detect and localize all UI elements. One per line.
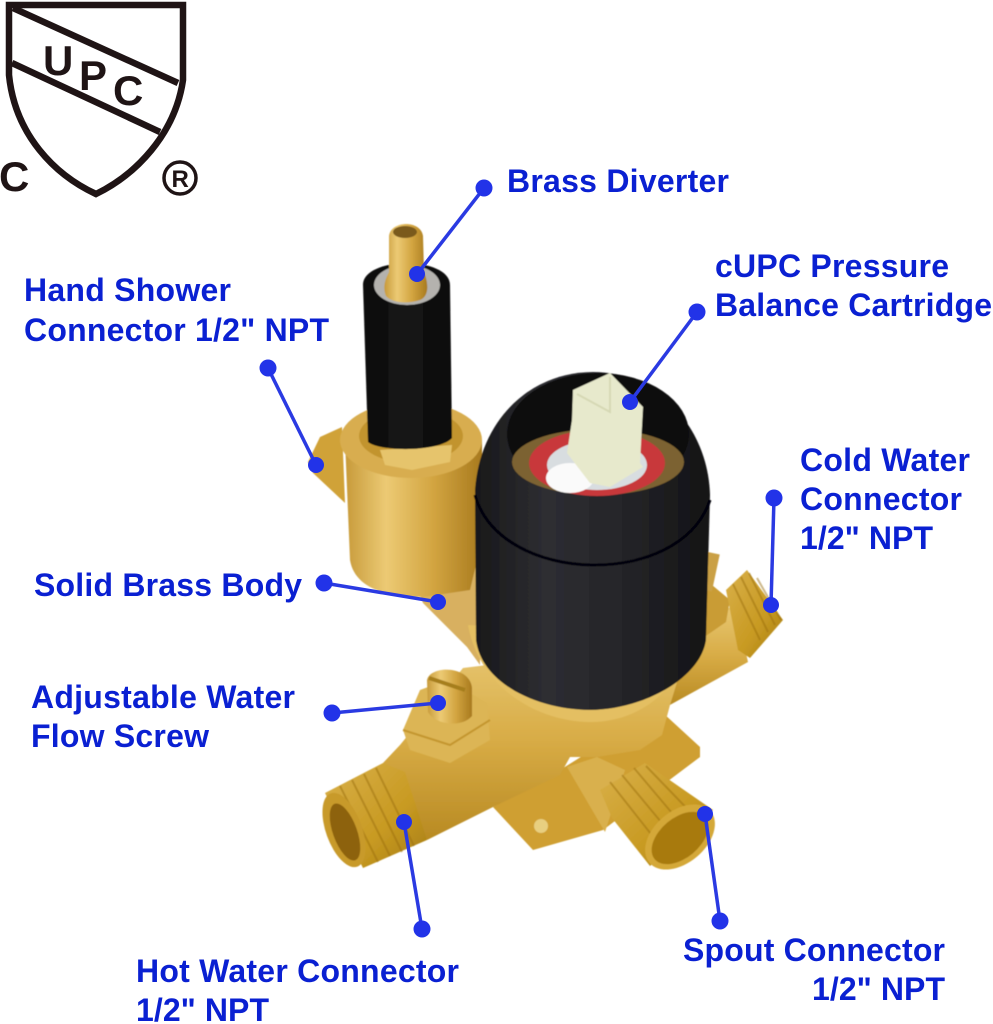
icon: cUPC certification shield: R <box>172 166 189 193</box>
mounting bracket <box>493 713 700 850</box>
diverter body <box>345 440 482 597</box>
lower body and bar <box>383 640 690 840</box>
callout: Solid Brass Body <box>34 567 446 610</box>
callout: cUPC Pressure Balance Cartridge <box>622 248 992 410</box>
adjusting screw <box>427 670 472 724</box>
callout: Adjustable Water Flow Screw <box>31 679 446 754</box>
callout: cUPC Pressure Balance Cartridge: cUPC Pressure <box>715 248 949 284</box>
black diverter sleeve <box>363 263 452 449</box>
callout: Hot Water Connector <box>136 814 459 1024</box>
hand shower connector <box>308 427 345 503</box>
black cartridge cover <box>475 372 710 710</box>
right arm with cold water pipe <box>660 550 783 706</box>
callout: Brass Diverter: Brass Diverter <box>507 163 729 199</box>
callout: Cold Water Connector: Connector <box>800 481 962 517</box>
hot water pipe <box>314 763 427 873</box>
cover opening <box>507 373 689 496</box>
callout: Solid Brass Body: Solid Brass Body <box>34 567 302 603</box>
callout: Spout Connector <box>683 806 945 1007</box>
callout: Cold Water Connector: Cold Water <box>800 442 970 478</box>
product illustration: shower valve <box>308 224 783 883</box>
callout: Hand Shower Connector <box>24 272 329 473</box>
callout: Cold Water Connector <box>763 442 970 613</box>
icon: cUPC certification shield: U <box>43 37 73 84</box>
callout: cUPC Pressure Balance Cartridge: Balance Cartridge <box>715 287 992 323</box>
callout: Cold Water Connector: 1/2" NPT <box>800 520 933 556</box>
spout connector <box>567 757 727 883</box>
icon: cUPC certification shield <box>0 5 196 200</box>
adjusting nut <box>403 680 490 763</box>
callout: Hand Shower Connector: Connector 1/2" NPT <box>24 312 329 348</box>
icon: cUPC certification shield: P <box>79 52 107 99</box>
callout: Hand Shower Connector: Hand Shower <box>24 272 231 308</box>
brass stem <box>384 224 427 302</box>
cartridge stem <box>567 373 643 487</box>
callout: Brass Diverter <box>409 163 729 282</box>
icon: cUPC certification shield: C <box>113 67 143 114</box>
callout: Hot Water Connector: Hot Water Connector <box>136 953 459 989</box>
callout: Adjustable Water Flow Screw: Adjustable Water <box>31 679 295 715</box>
callout: Spout Connector: Spout Connector <box>683 932 945 968</box>
brass ring under cartridge body <box>468 625 690 722</box>
connector between bodies <box>418 490 480 665</box>
callout: Spout Connector: 1/2" NPT <box>812 971 945 1007</box>
callout: Adjustable Water Flow Screw: Flow Screw <box>31 718 209 754</box>
